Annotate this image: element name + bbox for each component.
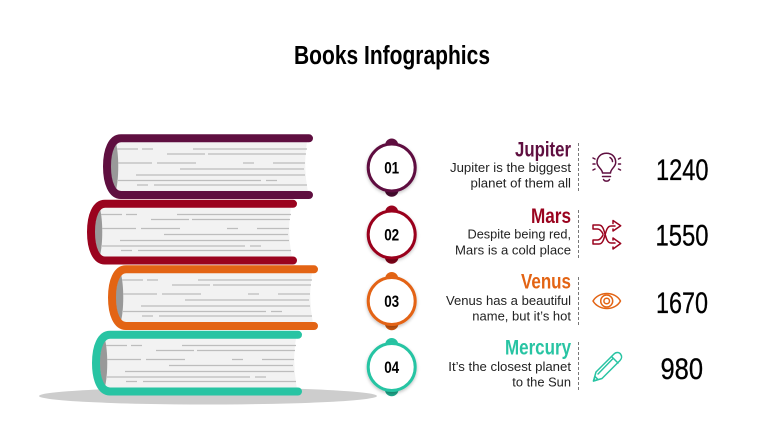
description: Venus: name, but it’s hot — [472, 310, 572, 324]
description: Venus: Venus has a beautiful — [446, 294, 571, 308]
value: 1670: 1670 — [656, 287, 708, 320]
icon: shuffle arrows — [593, 220, 621, 249]
book: teal — [96, 335, 298, 392]
description: Mars — [455, 228, 571, 257]
icon: eye — [593, 294, 620, 308]
description: Mercury — [448, 360, 572, 390]
book: purple — [107, 138, 309, 195]
description: Jupiter: planet of them all — [470, 176, 571, 190]
illustration: stack of books — [39, 138, 377, 405]
description: Jupiter — [450, 161, 572, 190]
shadow under books — [39, 388, 377, 404]
number badge 03 — [368, 272, 415, 330]
number badge 03: 03 — [384, 293, 399, 311]
heading: Mars: Mars — [531, 205, 571, 228]
number badge 02: 02 — [384, 226, 399, 244]
value: 980: 980 — [660, 353, 703, 386]
title: Books Infographics — [294, 42, 490, 70]
book: orange — [112, 269, 314, 326]
description: Venus — [446, 294, 572, 324]
number badge 04: 04 — [384, 359, 400, 377]
row 4: Mercury — [368, 336, 703, 396]
value: 1550: 1550 — [656, 220, 708, 252]
book: red — [91, 204, 293, 260]
heading: Venus: Venus — [521, 270, 571, 294]
heading: Mercury: Mercury — [505, 336, 571, 360]
value: 1240: 1240 — [656, 154, 708, 187]
number badge 02 — [368, 206, 415, 264]
row 1: Jupiter — [368, 138, 708, 197]
description: Mercury: to the Sun — [512, 376, 571, 390]
description: Mars: Mars is a cold place — [455, 243, 571, 257]
row 3: Venus — [368, 270, 708, 330]
number badge 01: 01 — [384, 160, 399, 178]
number badge 04 — [368, 338, 415, 396]
heading: Jupiter: Jupiter — [515, 138, 571, 162]
row 2: Mars — [368, 205, 708, 264]
number badge 01 — [368, 138, 415, 197]
description: Jupiter: Jupiter is the biggest — [450, 161, 572, 175]
description: Mars: Despite being red, — [468, 228, 571, 242]
icon: light bulb — [593, 153, 620, 181]
icon: pencil — [594, 352, 622, 381]
description: Mercury: It’s the closest planet — [448, 360, 572, 374]
